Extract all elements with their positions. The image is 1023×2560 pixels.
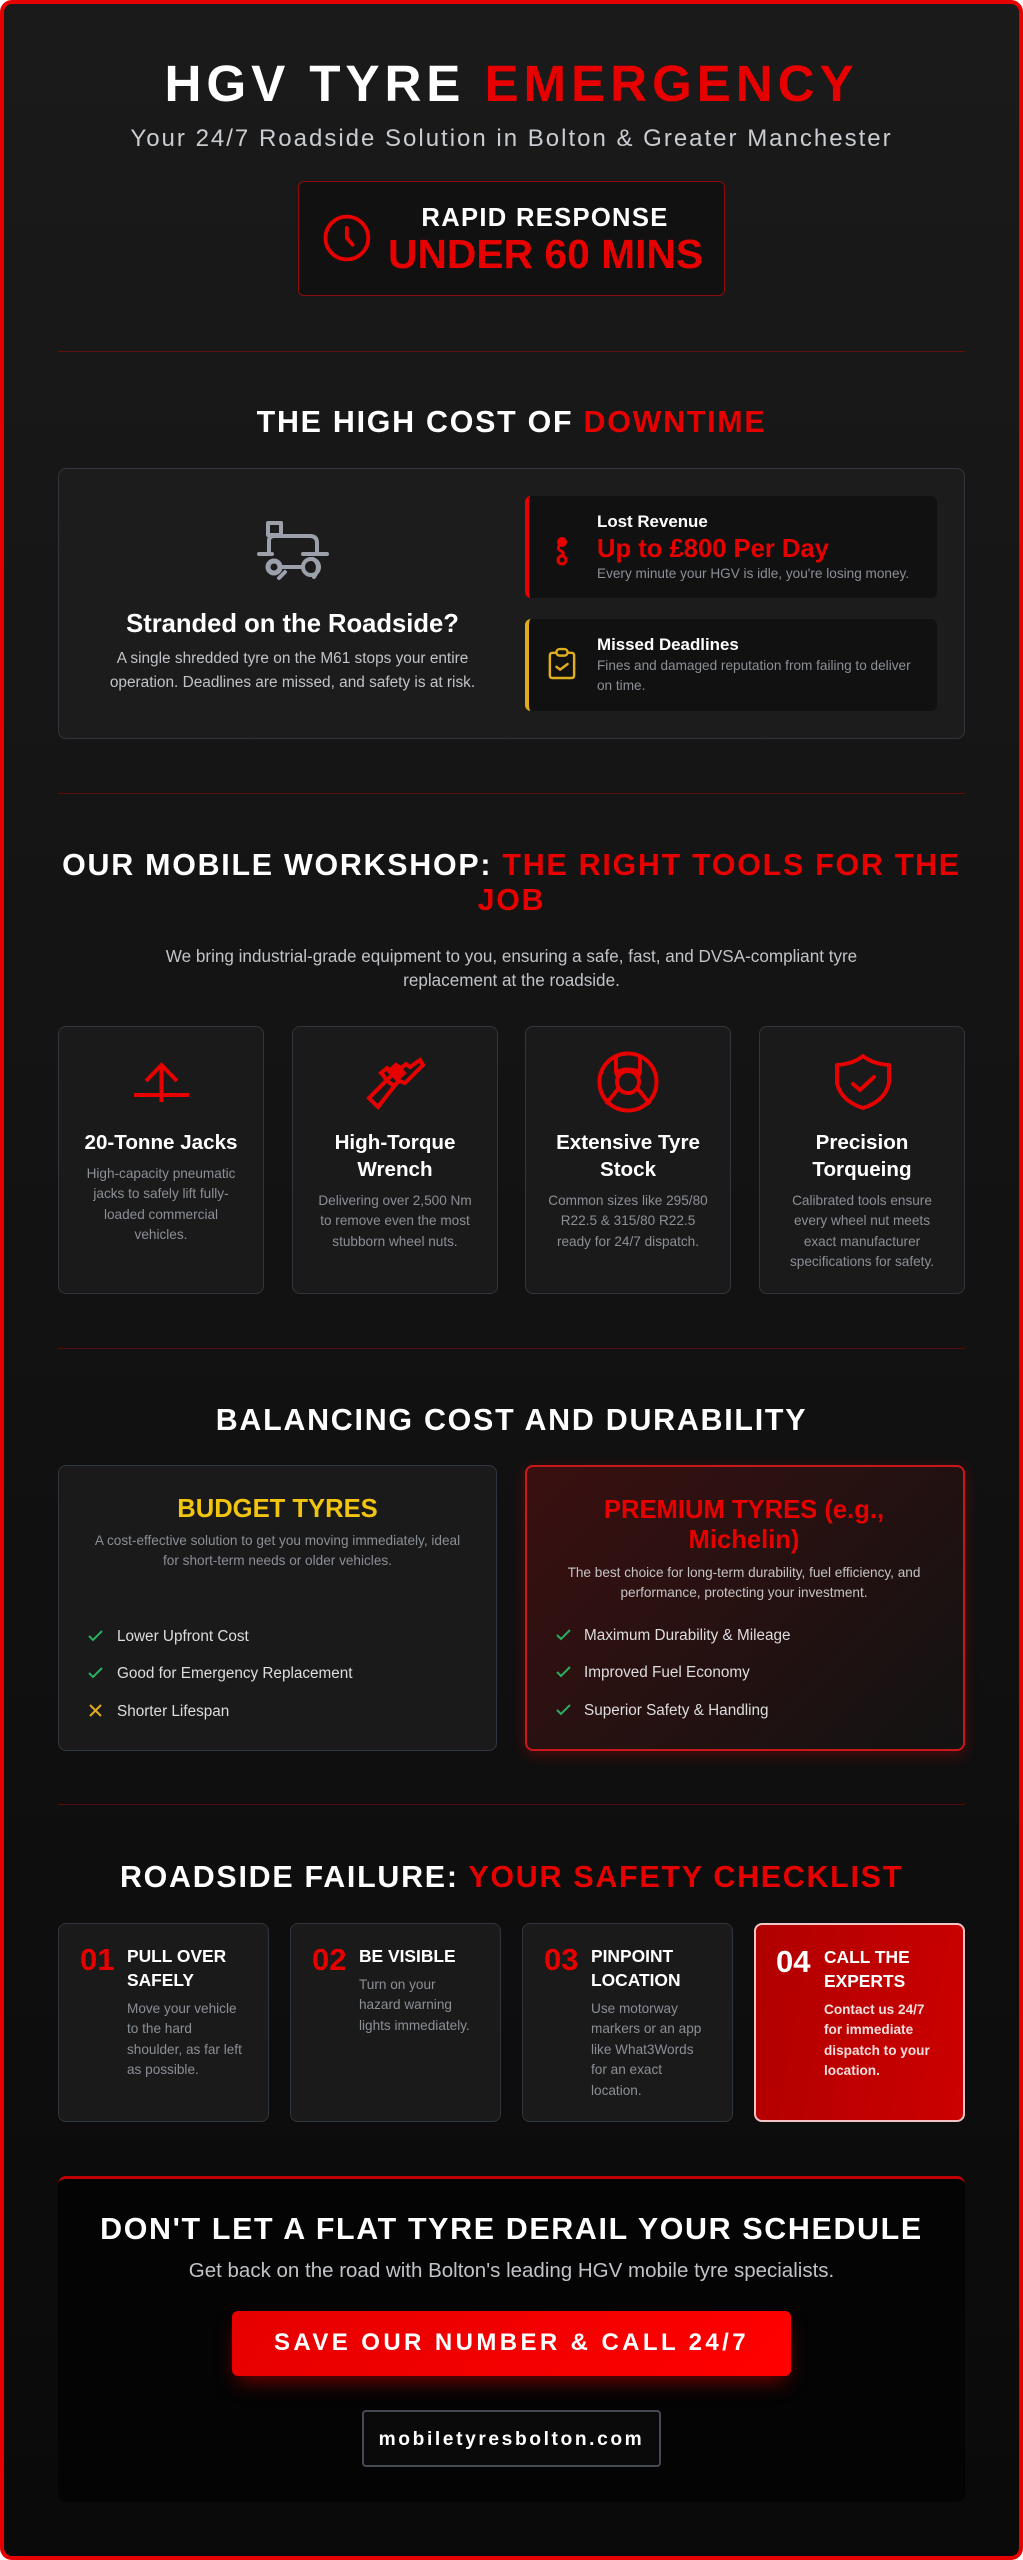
label: Missed Deadlines	[597, 635, 739, 654]
card text: specifications for safety.	[790, 1254, 934, 1269]
section heading: mobile workshop	[62, 848, 961, 917]
step 04	[754, 1923, 965, 2122]
step number: 04	[776, 1944, 810, 1979]
budget list	[88, 1628, 353, 1720]
card text	[548, 1193, 708, 1249]
premium description	[568, 1565, 920, 1600]
premium title: PREMIUM TYRES (e.g.,	[604, 1496, 884, 1524]
card text	[87, 1166, 235, 1242]
button label: SAVE OUR NUMBER & CALL 24/7	[274, 2329, 749, 2356]
step title	[591, 1946, 681, 1990]
step title	[127, 1946, 226, 1990]
cta text: Get back on the road with Bolton's leading HGV mobile tyre specialists.	[189, 2259, 834, 2282]
step number: 03	[544, 1942, 578, 1977]
subtitle: Your 24/7 Roadside Solution in Bolton & Greater Manchester	[130, 125, 893, 152]
website url: mobiletyresbolton.com	[379, 2429, 644, 2450]
step text: for an exact	[591, 2062, 662, 2077]
card text: Delivering over 2,500 Nm	[318, 1193, 472, 1208]
stranded description: A single shredded tyre on the M61 stops your entire	[117, 650, 468, 667]
badge label: RAPID RESPONSE	[421, 204, 669, 232]
section intro	[166, 947, 857, 990]
budget list: Good for Emergency Replacement	[117, 1665, 353, 1682]
call to action panel	[58, 2176, 965, 2502]
step text	[127, 2001, 242, 2077]
step 01	[58, 1923, 269, 2122]
budget list: Lower Upfront Cost	[117, 1628, 249, 1645]
premium list	[556, 1627, 791, 1719]
step text: to the hard	[127, 2021, 192, 2036]
panel: premium tyres	[525, 1465, 965, 1751]
header section	[130, 55, 893, 296]
card text: exact manufacturer	[804, 1234, 920, 1249]
section heading: cost and durability: BALANCING COST AND DURABILITY	[216, 1403, 807, 1437]
card title: 20-Tonne Jacks	[84, 1131, 238, 1154]
budget title: BUDGET TYRES	[177, 1495, 378, 1523]
card: wrench	[292, 1026, 498, 1294]
budget description: A cost-effective solution to get you moving immediately, ideal	[95, 1533, 460, 1548]
card title	[335, 1131, 455, 1181]
card text: Common sizes like 295/80	[548, 1193, 708, 1208]
cta button	[232, 2311, 791, 2376]
budget description: for short-term needs or older vehicles.	[163, 1553, 392, 1568]
icon: shield check	[835, 1054, 891, 1110]
section heading: downtime: THE HIGH COST OF DOWNTIME	[257, 405, 766, 439]
premium description: The best choice for long-term durability, fuel efficiency, and	[568, 1565, 920, 1580]
icon: jack	[134, 1062, 189, 1102]
card text: Calibrated tools ensure	[792, 1193, 932, 1208]
step text: Turn on your	[359, 1977, 436, 1992]
section heading: safety checklist: ROADSIDE FAILURE: YOUR SAFETY CHECKLIST	[120, 1860, 903, 1894]
step text: Move your vehicle	[127, 2001, 237, 2016]
cta heading: DON'T LET A FLAT TYRE DERAIL YOUR SCHEDULE	[100, 2212, 923, 2246]
card text: loaded commercial	[104, 1207, 218, 1222]
step text: Contact us 24/7	[824, 2002, 924, 2017]
step text: location.	[824, 2063, 880, 2078]
step text: shoulder, as far left	[127, 2042, 242, 2057]
step text: dispatch to your	[824, 2043, 930, 2058]
step title: SAFELY	[127, 1970, 194, 1990]
card text: High-capacity pneumatic	[87, 1166, 235, 1181]
step text: as possible.	[127, 2062, 199, 2077]
title: HGV TYRE EMERGENCY	[164, 55, 858, 112]
budget description	[95, 1533, 460, 1568]
card title	[812, 1131, 912, 1181]
card title	[556, 1131, 700, 1181]
budget list: Shorter Lifespan	[117, 1703, 229, 1720]
section intro: replacement at the roadside.	[403, 971, 620, 990]
card: torqueing	[759, 1026, 965, 1294]
card title: Stock	[600, 1158, 656, 1181]
stranded description: operation. Deadlines are missed, and safety is at risk.	[110, 674, 475, 691]
callout: lost revenue	[525, 496, 937, 598]
website box	[362, 2410, 661, 2467]
callout: missed deadlines	[525, 619, 937, 711]
step title: LOCATION	[591, 1970, 681, 1990]
step text: for immediate	[824, 2022, 913, 2037]
premium description: performance, protecting your investment.	[620, 1585, 868, 1600]
value: Up to £800 Per Day	[597, 535, 829, 563]
step text: lights immediately.	[359, 2018, 470, 2033]
card: jacks	[58, 1026, 264, 1294]
card text: vehicles.	[135, 1227, 187, 1242]
step text: like What3Words	[591, 2042, 694, 2057]
step text	[591, 2001, 701, 2098]
step 03	[522, 1923, 733, 2122]
step text: location.	[591, 2083, 642, 2098]
step 02	[290, 1923, 501, 2122]
premium list: Improved Fuel Economy	[584, 1664, 750, 1681]
description: on time.	[597, 678, 645, 693]
card title: Torqueing	[812, 1158, 912, 1181]
step text	[359, 1977, 470, 2033]
panel: cost of downtime	[58, 468, 965, 739]
step title: CALL THE	[824, 1947, 910, 1967]
icon: stranded truck	[257, 521, 329, 580]
step title	[824, 1947, 910, 1991]
card title: Precision	[816, 1131, 908, 1154]
card text: to remove even the most	[320, 1213, 470, 1228]
description	[597, 658, 911, 693]
step title: EXPERTS	[824, 1971, 905, 1991]
step title: PULL OVER	[127, 1946, 226, 1966]
step text	[824, 2002, 930, 2078]
card text	[318, 1193, 472, 1249]
section heading: mobile workshop: OUR MOBILE WORKSHOP: THE RIGHT TOOLS FOR THE	[62, 848, 961, 882]
rapid response badge	[298, 181, 725, 296]
icon: clipboard check	[548, 648, 576, 680]
premium list: Maximum Durability & Mileage	[584, 1627, 791, 1644]
icon: revenue	[556, 537, 568, 566]
premium title: Michelin)	[689, 1526, 799, 1554]
section heading: mobile workshop: JOB	[478, 883, 545, 917]
section intro: We bring industrial-grade equipment to you, ensuring a safe, fast, and DVSA-compliant tyre	[166, 947, 857, 966]
label: Lost Revenue	[597, 512, 708, 531]
step text: Use motorway	[591, 2001, 678, 2016]
step number: 02	[312, 1942, 346, 1977]
card text	[790, 1193, 934, 1269]
description: Every minute your HGV is idle, you're losing money.	[597, 566, 909, 581]
icon: wrench	[366, 1057, 426, 1110]
card title: Extensive Tyre	[556, 1131, 700, 1154]
card title: High-Torque	[335, 1131, 455, 1154]
card text: ready for 24/7 dispatch.	[557, 1234, 699, 1249]
stranded description	[110, 650, 475, 691]
icon: clock	[324, 214, 370, 262]
card text: every wheel nut meets	[794, 1213, 930, 1228]
description: Fines and damaged reputation from failing to deliver	[597, 658, 911, 673]
card text: stubborn wheel nuts.	[332, 1234, 458, 1249]
step title: BE VISIBLE	[359, 1946, 456, 1966]
step text: hazard warning	[359, 1997, 452, 2012]
card text: jacks to safely lift fully-	[93, 1186, 229, 1201]
card text: R22.5 & 315/80 R22.5	[561, 1213, 695, 1228]
premium title	[604, 1496, 884, 1554]
heading: stranded: Stranded on the Roadside?	[126, 610, 459, 638]
premium list: Superior Safety & Handling	[584, 1702, 769, 1719]
card: tyre stock	[525, 1026, 731, 1294]
step number: 01	[80, 1942, 114, 1977]
step text: markers or an app	[591, 2021, 701, 2036]
panel: budget tyres	[58, 1465, 497, 1751]
icon: tyre	[598, 1052, 658, 1112]
step title: PINPOINT	[591, 1946, 673, 1966]
card title: Wrench	[357, 1158, 433, 1181]
badge value: UNDER 60 MINS	[388, 231, 703, 277]
